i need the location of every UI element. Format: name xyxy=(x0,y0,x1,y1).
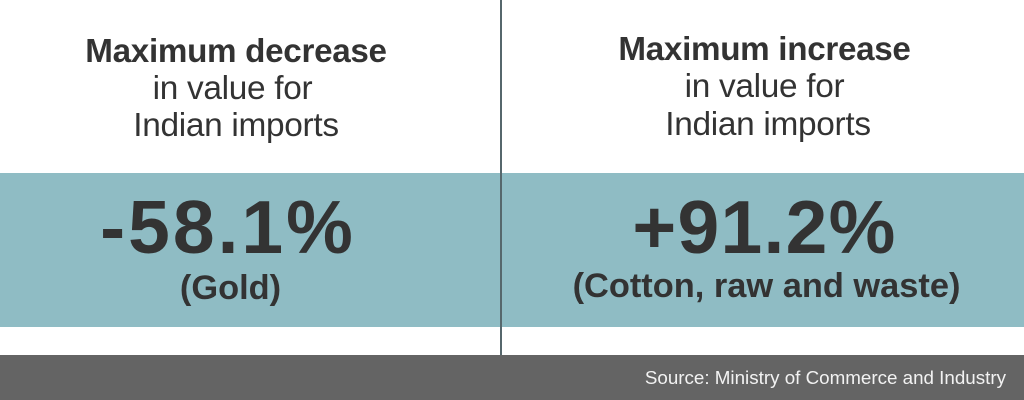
heading line: Maximum decrease xyxy=(85,33,387,70)
subheading line: in value for: in value for xyxy=(153,70,312,107)
label: cotton: (Cotton, raw and waste) xyxy=(573,267,960,305)
footer bar xyxy=(0,355,1024,400)
heading line: Maximum increase xyxy=(618,31,911,68)
panel: maximum increase heading xyxy=(618,31,911,143)
stat: decrease value: -58.1% xyxy=(100,185,356,269)
stat: increase value: +91.2% xyxy=(632,185,897,269)
subheading line: in value for: in value for xyxy=(685,68,844,105)
source text: Source: Ministry of Commerce and Industry xyxy=(645,367,1006,388)
teal band xyxy=(0,173,1024,327)
label: gold: (Gold) xyxy=(180,269,281,307)
vertical divider xyxy=(500,0,502,355)
panel: maximum decrease heading xyxy=(85,33,387,144)
subheading line: Indian imports: Indian imports xyxy=(665,106,871,143)
subheading line: Indian imports: Indian imports xyxy=(133,107,339,144)
